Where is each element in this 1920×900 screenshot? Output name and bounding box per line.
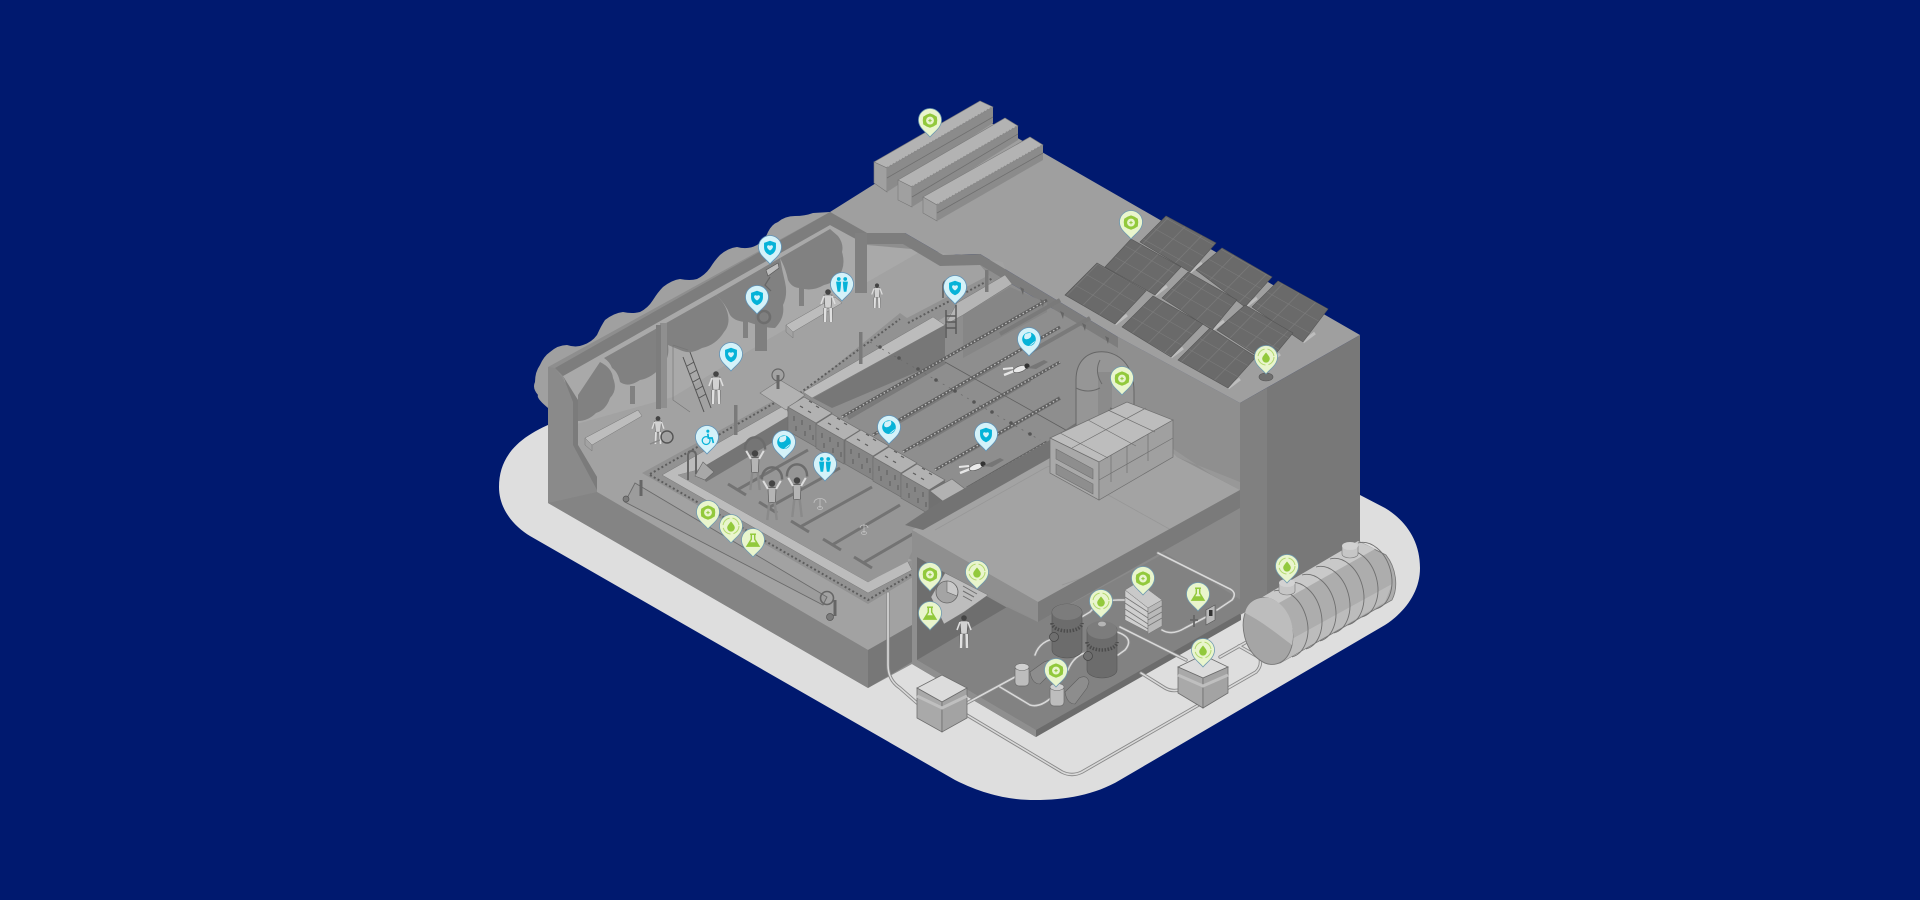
filter 1 xyxy=(1050,604,1082,658)
pin: chemistry dosing xyxy=(1186,582,1210,611)
wall above machine room xyxy=(1118,337,1240,490)
roof drain xyxy=(1259,373,1273,381)
unit box xyxy=(1050,402,1173,462)
solar panel struts xyxy=(1115,263,1315,388)
pin: safety 4 xyxy=(944,276,966,304)
pin: recreation xyxy=(772,430,796,459)
building underlay xyxy=(548,212,1240,737)
pin: water cube xyxy=(1192,638,1214,667)
security camera xyxy=(765,263,779,291)
life ring xyxy=(758,311,770,323)
room frame xyxy=(912,530,1038,737)
roof ledge xyxy=(1118,395,1240,490)
swimmer 2 xyxy=(959,458,1004,473)
seated person xyxy=(821,289,835,322)
solar panels xyxy=(1065,216,1328,388)
deep section far wall xyxy=(963,287,1047,358)
machine room floor xyxy=(917,553,1241,730)
aqua class 3 xyxy=(787,464,807,517)
wheelchair user xyxy=(650,416,673,444)
tree canopy 3 xyxy=(668,295,728,352)
pin: water filter xyxy=(1090,590,1112,618)
wheel lift xyxy=(772,369,784,389)
pool cover roller xyxy=(623,480,835,620)
lane floor strips xyxy=(848,300,1090,462)
pump 1 xyxy=(1015,661,1054,686)
pool edge strip over plate xyxy=(905,395,1118,530)
pin: recreation 2 xyxy=(878,416,900,444)
pin: energy air unit xyxy=(1110,366,1134,395)
back wall of terrace xyxy=(563,225,1010,500)
air handling unit xyxy=(1050,360,1173,500)
aqua class 2 xyxy=(762,467,782,520)
hedge behind back wall xyxy=(534,212,840,408)
bulkhead deck platform xyxy=(760,380,805,410)
pool surround grating xyxy=(642,273,1003,604)
pin: recreation 3 xyxy=(1018,328,1040,356)
trough 3 xyxy=(923,137,1043,221)
pin: energy troughs xyxy=(918,108,942,137)
movable bulkhead boxes xyxy=(788,397,973,514)
corner wall xyxy=(868,625,912,688)
balance cube right xyxy=(1178,655,1228,708)
deep coping strip xyxy=(803,317,945,398)
aqua class 1 xyxy=(745,437,765,490)
floor lip xyxy=(912,613,1241,737)
pin: safety 2 xyxy=(746,286,768,314)
trough 1 xyxy=(874,101,993,192)
left end wall xyxy=(548,367,597,503)
pin: chemistry pool xyxy=(742,528,764,557)
pin: water roof xyxy=(1254,346,1278,374)
front lower wall xyxy=(548,492,868,688)
tank hatch rear xyxy=(1342,542,1358,558)
trough tanks on roof xyxy=(874,101,1043,221)
pin: safety 5 xyxy=(974,422,998,451)
control panel screen xyxy=(931,573,988,624)
deep section floor xyxy=(805,265,1118,505)
pump 2 xyxy=(1050,677,1089,706)
pin: energy pump xyxy=(1044,658,1068,687)
pin: water controls xyxy=(966,560,988,589)
fountains xyxy=(814,498,868,534)
bench 1 xyxy=(585,410,642,451)
tower xyxy=(1240,335,1360,615)
slab right edge xyxy=(1038,490,1240,622)
pillars xyxy=(656,233,867,409)
terrace deck xyxy=(573,250,1010,650)
technician xyxy=(957,615,971,648)
pin: energy heat exchanger xyxy=(1132,566,1154,595)
pool lift seat xyxy=(688,451,714,480)
pin: energy controls xyxy=(918,562,942,591)
machine room roof plate xyxy=(912,395,1240,602)
balance cube left xyxy=(917,675,967,732)
left end wall inner face xyxy=(563,376,597,490)
hanging roof brackets xyxy=(1020,287,1109,344)
trees xyxy=(578,229,844,421)
shallow lane markers xyxy=(728,450,923,568)
pin: energy solar xyxy=(1120,210,1142,239)
far coping top xyxy=(945,275,1012,325)
pool coping xyxy=(662,405,912,593)
pin: water tank xyxy=(1276,554,1298,583)
pin: safety xyxy=(758,236,782,264)
pin: water cover xyxy=(720,514,742,543)
pool ladder xyxy=(943,280,958,338)
shallow section back wall xyxy=(698,415,790,482)
pin: energy cover xyxy=(696,500,720,529)
lifeguard ladder xyxy=(673,345,711,412)
tank hatch front xyxy=(1279,579,1295,595)
filter 2 xyxy=(1084,621,1117,678)
pin: accessibility xyxy=(696,426,718,454)
tree canopy 2 xyxy=(604,322,670,385)
bench 2 xyxy=(786,297,842,338)
base plate xyxy=(499,420,1420,800)
pin: safety 3 xyxy=(720,342,742,371)
duct elbow xyxy=(1088,364,1122,425)
tower left strip xyxy=(1240,388,1267,615)
pipework xyxy=(888,553,1268,774)
back wall top band xyxy=(555,212,1118,376)
machine room back walls xyxy=(917,557,1020,660)
roof slab xyxy=(830,117,1360,403)
pin: people 2 xyxy=(814,452,836,481)
shallow section floor xyxy=(678,417,935,582)
plate inner outline xyxy=(935,466,1183,585)
pin: people xyxy=(830,272,854,301)
tree canopy 4 xyxy=(716,258,786,328)
storage tank xyxy=(1236,541,1396,670)
control box and valve xyxy=(1190,605,1215,627)
lane ropes xyxy=(842,300,1060,488)
tree canopy 5 xyxy=(780,229,844,289)
bulkhead rail xyxy=(789,420,935,513)
lifeguard xyxy=(709,371,723,404)
trough 2 xyxy=(898,118,1018,207)
swimmer 1 xyxy=(1003,360,1048,375)
deep section sloped wall xyxy=(813,325,945,408)
tree canopy 1 xyxy=(578,362,615,421)
people xyxy=(650,283,1048,648)
pin: chemistry controls xyxy=(918,602,942,630)
flag posts xyxy=(734,270,988,435)
filter vessels xyxy=(1050,604,1117,678)
heat exchanger stack xyxy=(1125,582,1162,634)
backstroke flag line xyxy=(870,342,1040,440)
runner xyxy=(872,283,882,308)
pool cross line xyxy=(945,362,1080,438)
